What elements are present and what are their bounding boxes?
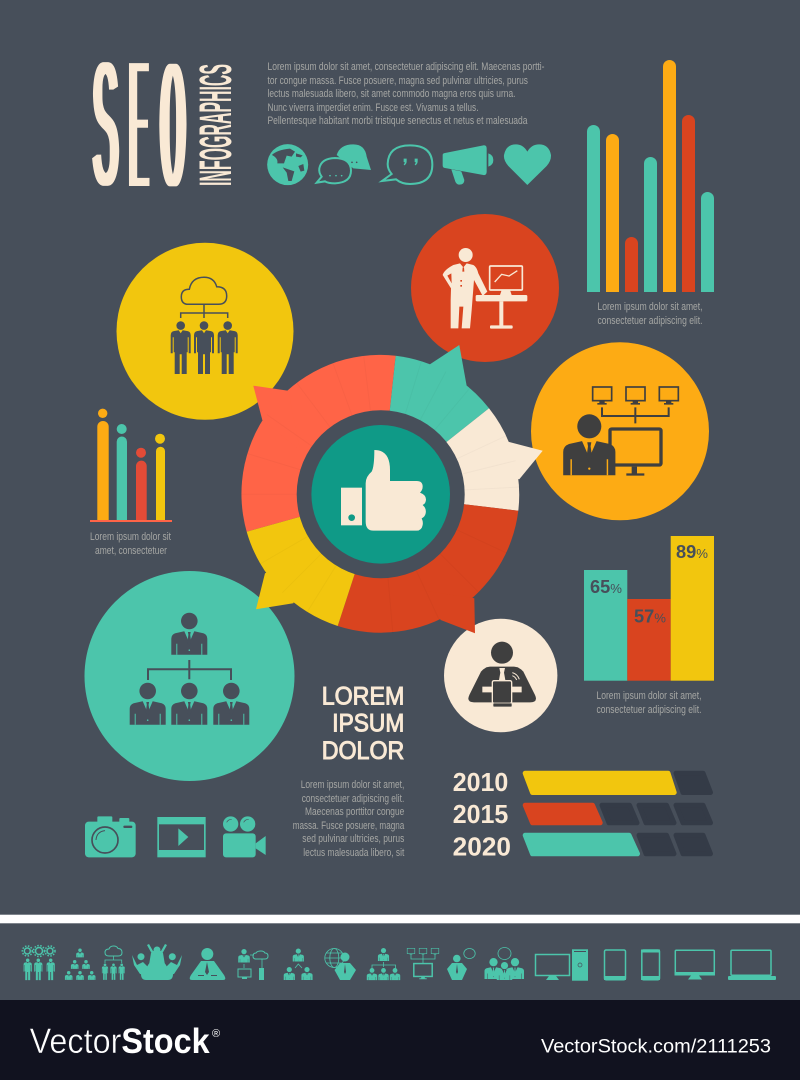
icon: heart [504, 144, 551, 185]
paragraph: right aligned: sed pulvinar ultricies, purus [302, 833, 405, 845]
bar: 2015 [525, 805, 710, 823]
intro paragraph: Nunc viverra imperdiet enim. Fusce est. Vivamus a tellus. [268, 102, 478, 114]
bar: 2010 [525, 773, 710, 792]
icon: phone [641, 950, 660, 980]
heading: SEO [92, 14, 185, 236]
intro paragraph: tor congue massa. Fusce posuere, magna sed pulvinar ultricies, purus [268, 75, 528, 87]
icon: large person [190, 948, 225, 980]
icon: laptop [728, 950, 776, 980]
heading: Lorem Ipsum Dolor: LOREM [322, 682, 404, 710]
caption: percentage chart: Lorem ipsum dolor sit amet, [596, 690, 702, 702]
icon: person with bubble [447, 948, 475, 980]
icon: gears and team [22, 946, 55, 980]
year labels: 2015 [453, 799, 508, 829]
paragraph: right aligned: consectetuer adipiscing elit. [302, 793, 404, 805]
bar chart: top right [587, 60, 714, 292]
caption: top right chart: consectetuer adipiscing elit. [598, 315, 702, 327]
timeline bars [453, 767, 710, 862]
heading: SEO: E [129, 14, 149, 236]
paragraph: right aligned: Maecenas porttitor congue [305, 806, 404, 818]
panel: orange circle network [531, 342, 709, 520]
heading: Lorem Ipsum Dolor: IPSUM [332, 710, 404, 738]
icon strip [22, 944, 776, 981]
title: SEO Infographics [92, 14, 241, 236]
intro paragraph: lectus malesuada libero, sit amet commodo magna eros quis urna. [268, 88, 516, 100]
heading: Lorem Ipsum Dolor [322, 682, 404, 765]
year labels [453, 767, 511, 862]
segment: yellow [247, 494, 381, 626]
value: 57%: 57% [634, 607, 666, 627]
icon: org chart small [367, 948, 400, 980]
segment: teal [381, 345, 489, 494]
bar: 2020 [525, 835, 710, 854]
intro paragraph [268, 61, 545, 127]
paragraph: right aligned: massa. Fusce posuere, magna [293, 820, 405, 832]
icon: video player [157, 817, 206, 857]
small bar chart: left [90, 409, 172, 522]
year labels: 2010 [453, 767, 508, 797]
heading: Lorem Ipsum Dolor: DOLOR [322, 737, 404, 765]
icon: person with tablet [468, 642, 536, 707]
intro paragraph: Pellentesque habitant morbi tristique senectus et netus et malesuada [268, 115, 528, 127]
heading: SEO: O [161, 18, 185, 233]
icon: monitors and person [593, 387, 678, 476]
icon: monitor network [407, 948, 439, 979]
icon: globe [267, 144, 308, 185]
donut inner ring [297, 410, 465, 578]
footer logo: ® [212, 1028, 220, 1040]
caption: top right chart: Lorem ipsum dolor sit amet, [598, 301, 702, 313]
donut chart with pointers [241, 345, 543, 633]
icon: person cloud devices [238, 949, 268, 980]
panel: red circle presenter [411, 214, 559, 362]
icon: cloud network [181, 277, 228, 318]
icon: globe and person [325, 948, 356, 980]
footer band [0, 1000, 800, 1080]
icon: person [563, 414, 615, 475]
icon: megaphone [443, 145, 493, 185]
media icons [85, 816, 266, 857]
year labels: 2020 [453, 832, 511, 862]
paragraph: right aligned [293, 779, 405, 859]
icon: quote bubble [382, 145, 432, 184]
caption: top right chart [598, 301, 702, 327]
heading: SEO: S [92, 21, 119, 228]
value: 65%: 65% [590, 577, 622, 597]
icon: three people [284, 948, 313, 980]
segment: red [338, 494, 518, 633]
footer logo: VectorStock [30, 1022, 210, 1061]
icon: org chart [130, 613, 249, 725]
icon row [267, 144, 551, 185]
caption: percentage chart [596, 690, 702, 716]
segment: cream [381, 408, 543, 511]
caption: left chart: Lorem ipsum dolor sit [90, 531, 171, 543]
paragraph: right aligned: Lorem ipsum dolor sit amet, [301, 779, 404, 791]
icon: camera [85, 816, 136, 857]
icon: three men [171, 321, 238, 374]
icon: cloud team [102, 946, 125, 980]
icon: movie camera [223, 816, 266, 857]
donut center [311, 425, 450, 564]
panel: cream circle person with tablet [444, 619, 557, 732]
icon: thumbs up [341, 450, 426, 531]
icon: display [674, 950, 715, 980]
panel: yellow circle cloud team [116, 243, 294, 420]
footer url: VectorStock.com/2111253 [541, 1037, 771, 1058]
value: 89%: 89% [676, 542, 708, 562]
intro paragraph: Lorem ipsum dolor sit amet, consectetuer adipiscing elit. Maecenas portti- [268, 61, 545, 73]
paragraph: right aligned: lectus malesuada libero, sit [303, 847, 404, 859]
icon: group with bubble [484, 948, 524, 980]
divider: white band [0, 915, 800, 923]
bar chart: percentages [584, 536, 714, 681]
segment: coral [241, 355, 396, 532]
panel: big teal circle hierarchy [84, 571, 294, 781]
caption: percentage chart: consectetuer adipiscing elit. [596, 704, 702, 716]
icon: speech bubbles [317, 144, 371, 183]
icon: presenter with monitor [443, 248, 527, 329]
icon: desktop computer [536, 949, 588, 981]
icon: cloud and people [132, 944, 182, 980]
caption: left chart [90, 531, 171, 557]
icon: pyramid team [65, 948, 95, 980]
icon: tablet [604, 950, 626, 980]
caption: left chart: amet, consectetuer [95, 545, 167, 557]
